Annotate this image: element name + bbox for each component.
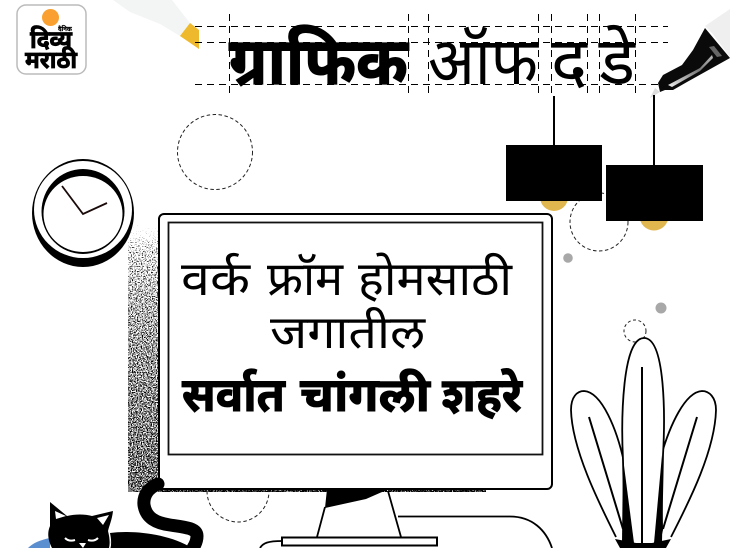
keyboard outline — [260, 516, 552, 548]
monitor — [159, 214, 552, 489]
clock — [32, 159, 134, 267]
title guide lines — [195, 14, 668, 97]
logo: Divya Marathi: मराठी — [25, 46, 78, 74]
pendant lamp: left — [506, 96, 602, 211]
cat — [28, 484, 197, 548]
headline text: चांगली — [300, 368, 431, 421]
stippled monitor shadow — [128, 225, 486, 492]
grey dots — [563, 253, 666, 314]
pendant lamp: right — [606, 95, 703, 230]
title: graphic of the day: ऑफ — [428, 24, 539, 98]
headline text: वर्क — [181, 252, 251, 305]
dashed circle: under monitor — [207, 491, 269, 522]
headline text: जगातील — [270, 306, 426, 358]
title: graphic of the day: द — [551, 24, 588, 98]
headline text: सर्वात — [182, 368, 286, 421]
dashed circle: behind lamps — [570, 193, 628, 251]
dashed circle: above plant — [624, 320, 646, 342]
monitor stand — [317, 489, 401, 537]
logo: Divya Marathi: दैनिक — [58, 25, 73, 33]
dashed circle: upper left — [178, 114, 252, 190]
logo: Divya Marathi — [17, 5, 86, 74]
headline text: होमसाठी — [358, 252, 513, 305]
title: graphic of the day: डे — [598, 24, 636, 98]
monitor base — [282, 538, 437, 546]
screen — [168, 222, 542, 454]
plant — [571, 338, 716, 548]
icon: black marker — [650, 9, 730, 98]
title: graphic of the day: ग्राफिक — [229, 24, 409, 98]
title: graphic of the day — [229, 24, 636, 98]
headline text: फ्रॉम — [267, 252, 344, 305]
icon: yellow highlighter — [113, 0, 199, 49]
logo: Divya Marathi: दिव्य — [30, 25, 73, 54]
headline text — [181, 252, 523, 421]
headline text: शहरे — [442, 368, 523, 421]
